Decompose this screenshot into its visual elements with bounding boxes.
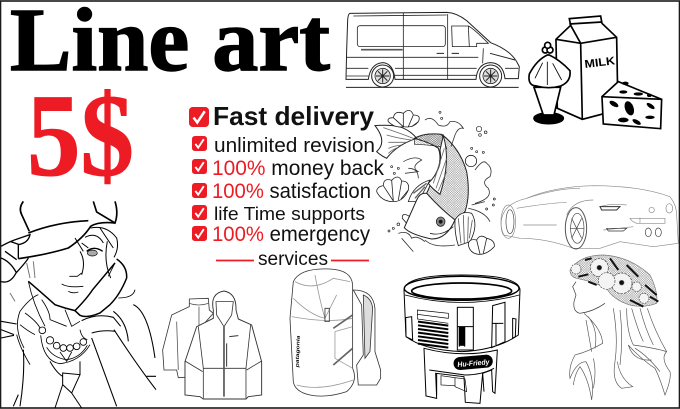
cap [20,201,117,233]
illustration: van [346,12,519,87]
illustration: patagonia jackets [163,291,262,399]
fish tail [375,125,417,158]
fish body [414,134,468,220]
cheese [602,82,662,129]
illustration: milk carton, sundae and cheese [529,16,662,129]
illustration: sports car [501,186,678,249]
backpack logo: patagonia [295,335,302,369]
face outline [28,263,115,311]
eye [87,248,103,256]
illustration: patagonia backpack [290,269,381,396]
side fin [408,180,430,202]
item: emergency services: 100% emergency [212,223,370,246]
neck [50,310,80,326]
pectoral fin [455,212,475,246]
item: unlimited revision: unlimited revision [214,134,375,157]
item: fast delivery: Fast delivery [213,101,375,131]
feature checklist [189,101,384,270]
right hair [75,227,118,278]
illustration: girl with flower crown [570,255,670,400]
dorsal fin [428,136,446,194]
hand on cheek [75,259,127,317]
lotus flowers [377,110,494,254]
item: life time supports: life Time supports [214,203,365,224]
shoulders and arms [1,305,156,406]
illustration: woman with cap [0,201,156,408]
item: money back: 100% money back [212,157,384,180]
nose and mouth [62,273,83,293]
Hu-Friedy logo: Hu-Friedy [457,357,491,369]
sundae [529,42,570,124]
left hair [17,281,50,365]
price: 5$ [27,70,134,201]
item: services with rules: services [258,248,328,270]
item: satisfaction: 100% satisfaction [212,180,371,203]
profile face [573,282,605,313]
water splashes [398,118,491,252]
hand on cap [0,235,30,282]
fish head [404,193,455,239]
illustration: Hu-Friedy instrument cup [404,275,520,403]
necklace [39,327,87,351]
long hair [570,308,670,400]
flower crown [570,255,658,307]
tie [50,361,82,408]
dorsal bump [465,155,477,167]
illustration: koi fish [375,110,495,254]
milk carton: MILK [584,55,617,71]
